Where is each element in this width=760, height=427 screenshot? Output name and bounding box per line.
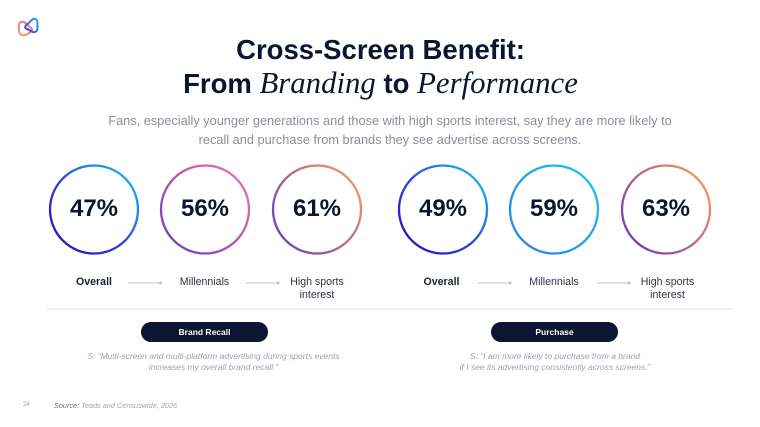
- value 47%: 47%: [70, 195, 118, 222]
- label high sports, purchase: High sports: [641, 276, 694, 288]
- value 56%: 56%: [181, 195, 229, 222]
- subtitle: recall and purchase from brands they see advertise across screens.: [199, 132, 581, 147]
- arrow: millennials to high sports, recall: [246, 282, 280, 284]
- pill: Purchase: [491, 322, 618, 342]
- ring: 56%: [161, 166, 249, 254]
- quote: purchase: [460, 351, 651, 372]
- label millennials, recall: Millennials: [180, 276, 229, 288]
- label millennials, purchase: Millennials: [529, 276, 579, 288]
- ring: 49%: [399, 166, 487, 254]
- value 59%: 59%: [530, 195, 578, 222]
- quote: brand recall: S: “Multi-screen and multi-platform advertising during sports events: [87, 351, 340, 361]
- quote: brand recall: increases my overall brand recall.”: [149, 362, 278, 372]
- arrow: overall to millennials, purchase: [478, 282, 512, 284]
- value 61%: 61%: [293, 195, 341, 222]
- label overall, purchase: Overall: [424, 276, 459, 288]
- divider: [47, 308, 734, 310]
- arrow: overall to millennials, recall: [128, 282, 162, 284]
- title: Cross-Screen Benefit:: [236, 34, 525, 65]
- pill: Brand Recall: Brand Recall: [179, 327, 230, 337]
- label overall, recall: Overall: [76, 276, 112, 288]
- label high sports, purchase: [641, 276, 694, 300]
- label high sports, purchase: interest: [650, 288, 685, 300]
- quote: purchase: S: “I am more likely to purchase from a brand: [470, 351, 640, 361]
- ring: 61%: [273, 166, 361, 254]
- arrow: millennials to high sports, purchase: [597, 282, 630, 284]
- ring: 63%: [622, 166, 710, 254]
- subtitle: Fans, especially younger generations and those with high sports interest, say they are more likely to: [108, 113, 672, 128]
- value 63%: 63%: [642, 195, 690, 222]
- pill: Brand Recall: [141, 322, 268, 342]
- label high sports, recall: interest: [300, 288, 334, 300]
- ring: 47%: [50, 166, 138, 254]
- logo icon: [18, 18, 38, 36]
- value 49%: 49%: [419, 195, 467, 222]
- pill: Purchase: Purchase: [535, 327, 574, 337]
- ring: 59%: [510, 166, 598, 254]
- title: From Branding to Performance: [183, 66, 578, 100]
- label high sports, recall: [290, 276, 344, 300]
- source note: Source: Teads and Censuswide, 2026: [54, 400, 177, 410]
- quote: purchase: if I see its advertising consistently across screens.”: [460, 362, 650, 372]
- subtitle: [108, 113, 672, 147]
- label high sports, recall: High sports: [290, 276, 344, 288]
- quote: brand recall: [87, 351, 340, 372]
- page number: 24: [23, 402, 30, 408]
- title: [183, 34, 578, 100]
